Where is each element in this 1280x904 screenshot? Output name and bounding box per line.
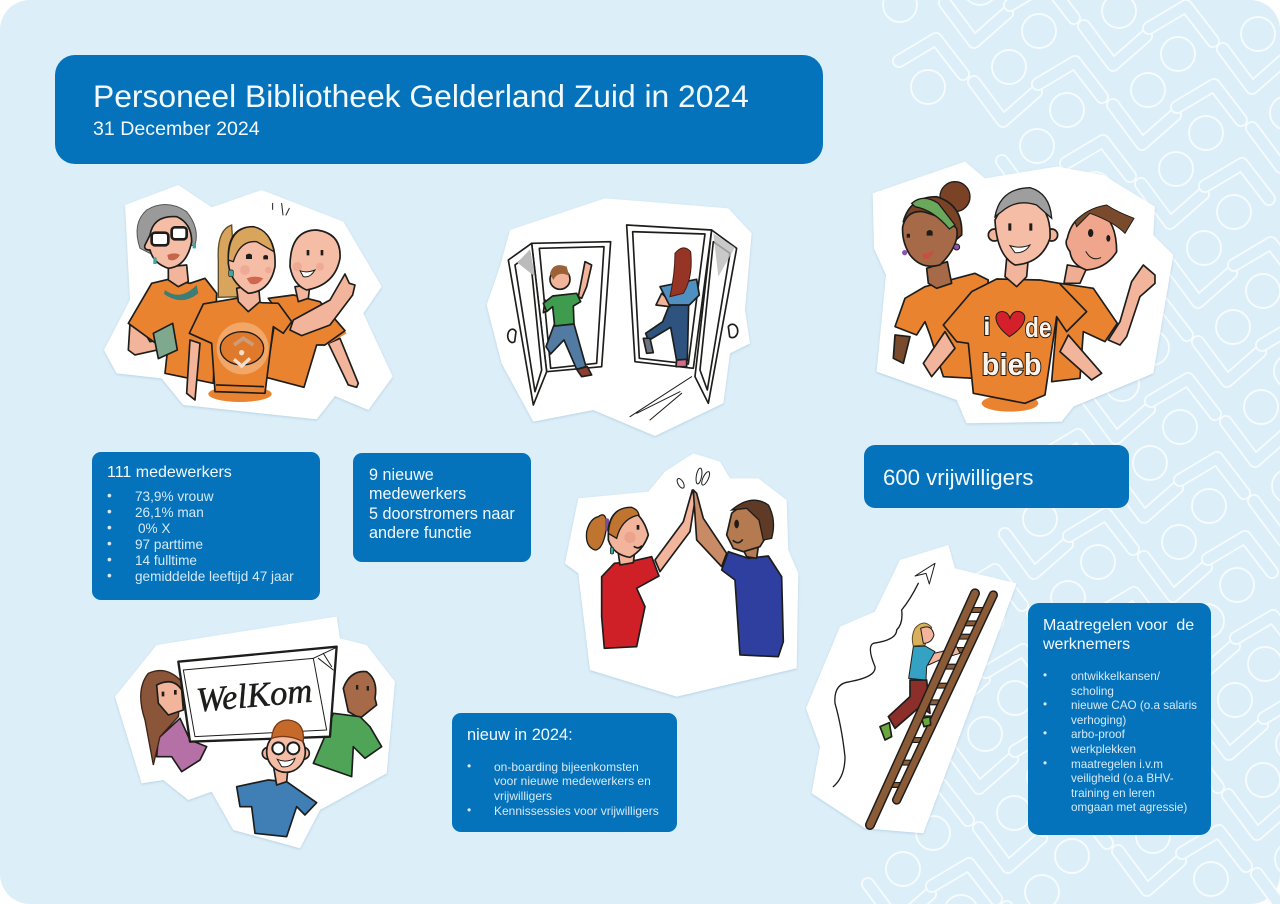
measures list: [1043, 669, 1197, 814]
measures list: werkplekken: [1071, 743, 1136, 756]
new in 2024 list: •: [467, 759, 471, 773]
panel: volunteers: [864, 445, 1129, 508]
staff statistics list: •: [107, 552, 112, 567]
illustration: woman climbing a ladder: [806, 545, 1017, 833]
measures list: scholing: [1071, 685, 1114, 698]
staff statistics list: 0% X: [138, 521, 170, 536]
measures list: arbo-proof: [1071, 728, 1125, 741]
staff statistics list: 26,1% man: [135, 505, 204, 520]
new in 2024 list: Kennissessies voor vrijwilligers: [494, 804, 659, 818]
new in 2024 list: on-boarding bijeenkomsten: [494, 760, 639, 774]
staff statistics list: •: [107, 536, 112, 551]
background pattern: [868, 0, 1280, 904]
staff statistics list: •: [107, 488, 112, 503]
staff statistics list: •: [107, 568, 112, 583]
measures list: •: [1043, 669, 1047, 682]
illustration: three volunteers with i love de bieb shirt: de: [1025, 312, 1052, 343]
staff statistics list: 14 fulltime: [135, 553, 197, 568]
staff statistics list: 73,9% vrouw: [135, 489, 214, 504]
measures list: verhoging): [1071, 714, 1126, 727]
illustration: three volunteers with i love de bieb shirt: [873, 162, 1173, 423]
title banner: [55, 55, 823, 164]
title: Personeel Bibliotheek Gelderland Zuid in 2024: [93, 78, 749, 114]
illustration: people holding a welcome sign: WelKom: [195, 672, 314, 720]
heading: new in 2024: nieuw in 2024:: [467, 726, 573, 744]
illustration: three volunteers with i love de bieb shirt: bieb: [982, 348, 1042, 382]
measures list: •: [1043, 757, 1047, 770]
panel: new employees: 5 doorstromers naar: [369, 505, 515, 523]
panel: new employees: medewerkers: [369, 485, 466, 503]
new in 2024 list: vrijwilligers: [494, 789, 552, 803]
measures list: •: [1043, 727, 1047, 740]
measures list: training en leren: [1071, 787, 1155, 800]
illustration: two colleagues giving a high five: [565, 453, 798, 697]
illustration: three volunteers with i love de bieb shirt: i: [983, 313, 990, 341]
heading: measures: Maatregelen voor de: [1043, 617, 1194, 634]
staff statistics list: •: [107, 520, 112, 535]
panel: new employees: [353, 453, 531, 562]
measures list: •: [1043, 698, 1047, 711]
measures list: omgaan met agressie): [1071, 801, 1187, 814]
panel: staff figures: [92, 452, 320, 600]
new in 2024 list: [467, 759, 659, 818]
new in 2024 list: •: [467, 803, 471, 817]
measures list: nieuwe CAO (o.a salaris: [1071, 699, 1197, 712]
measures list: veiligheid (o.a BHV-: [1071, 772, 1174, 785]
heading: measures: [1043, 617, 1194, 653]
staff statistics list: 97 parttime: [135, 537, 203, 552]
panel: measures for employees: [1028, 603, 1211, 835]
illustration: people holding a welcome sign: [115, 617, 395, 848]
heading: staff count: 111 medewerkers: [107, 464, 232, 481]
heading: measures: werknemers: [1043, 636, 1130, 653]
illustration: two colleagues walking through doors: [487, 198, 752, 436]
staff statistics list: [107, 488, 294, 584]
panel: new employees: 9 nieuwe: [369, 466, 434, 484]
staff statistics list: •: [107, 504, 112, 519]
staff statistics list: gemiddelde leeftijd 47 jaar: [135, 569, 294, 584]
new in 2024 list: voor nieuwe medewerkers en: [494, 774, 651, 788]
panel: volunteers: 600 vrijwilligers: [883, 465, 1033, 490]
illustration: three employees in orange shirts: [104, 185, 393, 419]
panel: new employees: andere functie: [369, 524, 472, 542]
panel: new in 2024: [452, 713, 677, 832]
measures list: maatregelen i.v.m: [1071, 758, 1163, 771]
date subtitle: 31 December 2024: [93, 118, 260, 140]
measures list: ontwikkelkansen/: [1071, 670, 1160, 683]
